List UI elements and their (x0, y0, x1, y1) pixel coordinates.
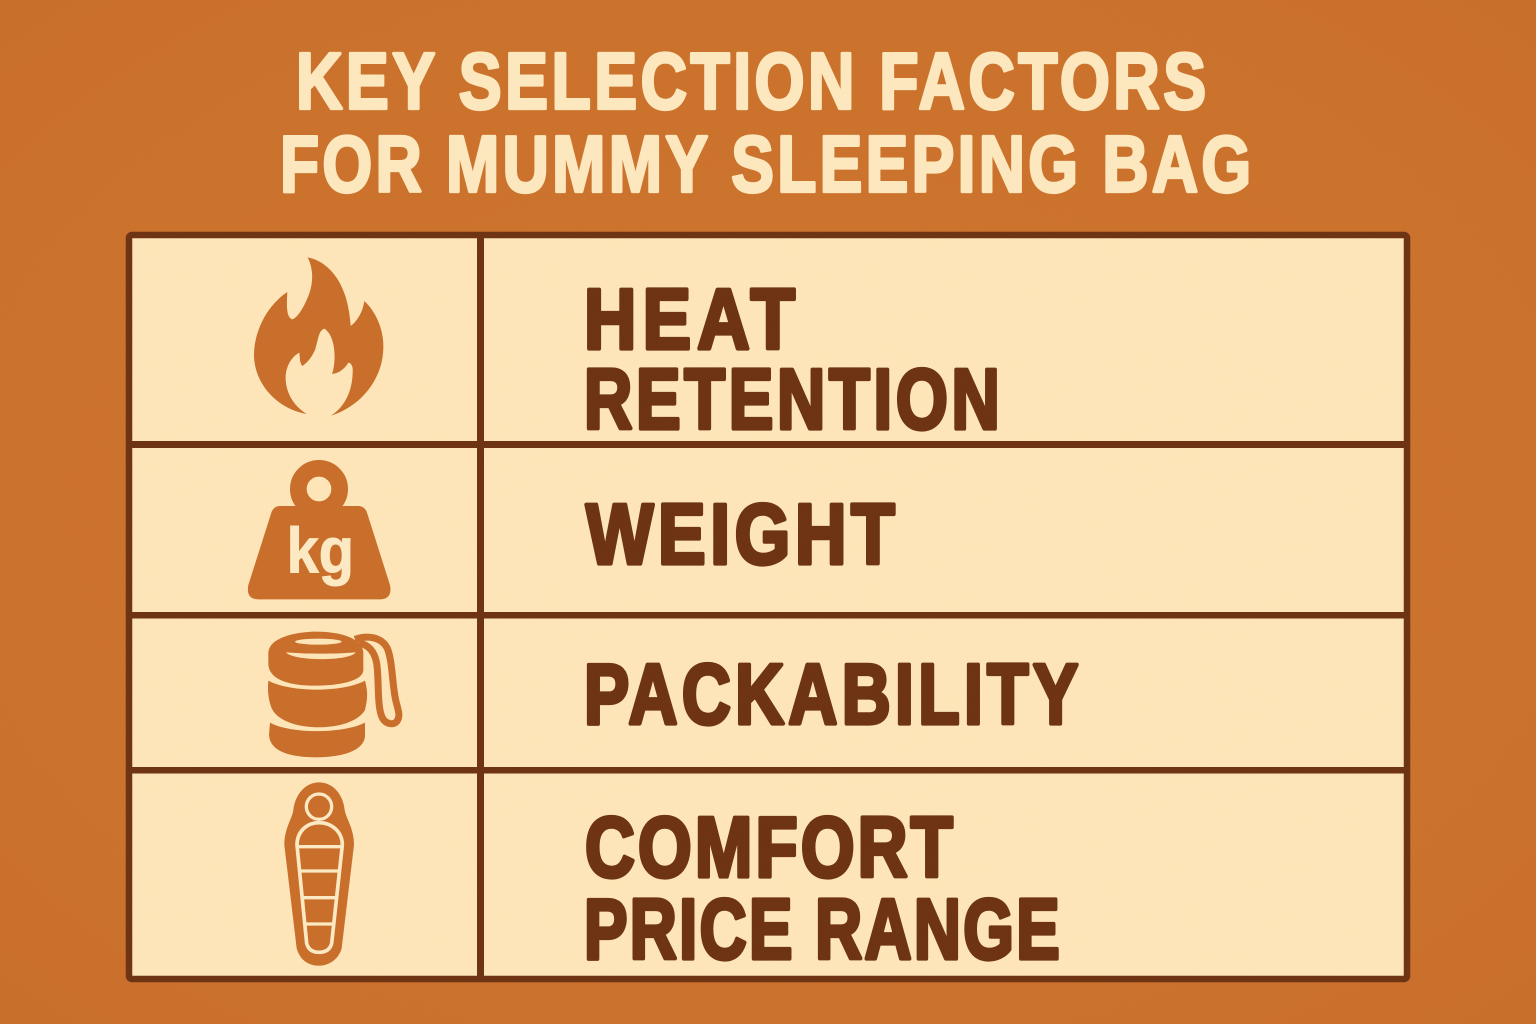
label: heat retention: RETENTION (584, 353, 1000, 447)
panel: factors table (129, 235, 1407, 979)
label: heat retention (584, 271, 1000, 447)
label: comfort and price range: PRICE RANGE (584, 882, 1060, 978)
icon: kg weight: kg (287, 514, 354, 586)
icon: stuff sack (268, 632, 399, 757)
icon: mummy sleeping bag (284, 782, 354, 966)
label: comfort and price range (584, 801, 1060, 978)
title: FOR MUMMY SLEEPING BAG (280, 120, 1251, 209)
label: heat retention: HEAT (584, 271, 795, 367)
row: packability (268, 632, 1078, 757)
label: packability: PACKABILITY (584, 647, 1078, 742)
title (280, 37, 1251, 209)
icon: flame (254, 257, 383, 416)
row: comfort and price range (284, 782, 1060, 978)
title: KEY SELECTION FACTORS (296, 37, 1206, 126)
row: heat retention (254, 257, 1000, 447)
row: weight (248, 468, 895, 599)
label: weight: WEIGHT (586, 487, 895, 582)
icon: kg weight (248, 468, 390, 599)
label: comfort and price range: COMFORT (585, 801, 953, 895)
